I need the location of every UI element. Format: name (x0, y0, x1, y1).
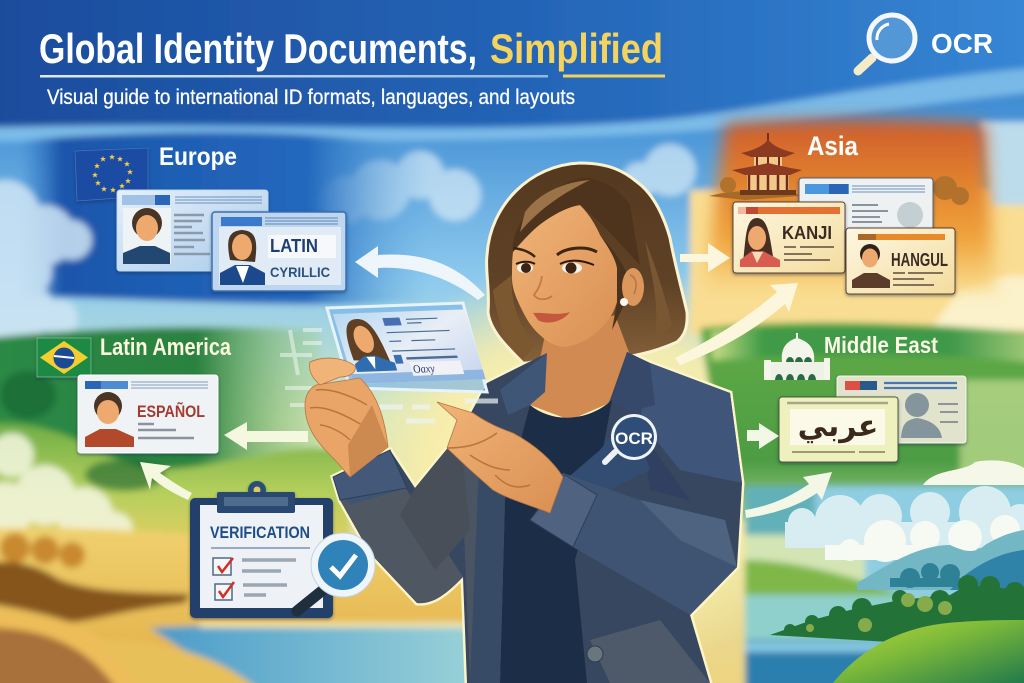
icon: EU flag (75, 148, 148, 201)
icon: magnifier with check (297, 533, 375, 611)
Asia heading: Asia (807, 131, 859, 161)
shirt (500, 400, 612, 683)
clipboard heading: VERIFICATION (210, 524, 310, 542)
arrow: to Asia (680, 243, 730, 272)
OCR logo (858, 15, 993, 71)
icon: pagoda (709, 133, 969, 205)
arrows (140, 243, 832, 518)
finger details (447, 433, 530, 487)
ID card: back (799, 178, 933, 232)
bottom right scenery (770, 460, 1024, 683)
ear and earring (620, 268, 644, 306)
ID card held: Oaxy (411, 363, 437, 376)
facial features (513, 248, 597, 323)
icon: Brazil flag (37, 338, 91, 377)
ID card: Espanol: ESPAÑOL (137, 401, 205, 421)
OCR badge (605, 414, 657, 462)
subtitle: Visual guide to international ID formats, languages, and layouts (47, 86, 575, 109)
fist with thumb (305, 358, 388, 477)
ID card: back man (117, 190, 268, 271)
ID card: Latin Cyrillic: LATIN (270, 235, 318, 256)
cuff left arm (333, 450, 407, 500)
Europe heading: Europe (159, 143, 237, 171)
jacket (333, 352, 742, 683)
clipboard board (190, 481, 333, 618)
title: Simplified (490, 25, 663, 72)
hair front (493, 178, 672, 360)
OCR logo: OCR (931, 28, 993, 59)
presenter (305, 163, 742, 683)
ID card: Latin Cyrillic: CYRILLIC (270, 264, 330, 280)
OCR badge: OCR (615, 429, 653, 448)
arrow: to Middle East (747, 423, 779, 449)
ID card: Hangul: HANGUL (891, 250, 948, 270)
button (587, 646, 603, 662)
icon: mosque (764, 333, 830, 380)
ID card: Arabic: عربي (798, 409, 878, 444)
panel: Middle East (764, 332, 966, 462)
panel: Asia (709, 131, 969, 294)
Middle East heading: Middle East (824, 332, 938, 358)
ID card: Hangul (846, 228, 955, 294)
Latin America heading: Latin America (100, 334, 232, 361)
arrow: Asia lower (675, 283, 798, 365)
presenter outline glow (333, 352, 742, 683)
arrow: from verification (140, 462, 192, 500)
checklist (213, 558, 296, 600)
Asia band glow (705, 120, 995, 290)
neck (530, 315, 630, 420)
ID card: Arabic (779, 397, 898, 462)
sleeve right arm (530, 473, 737, 615)
lapels (470, 352, 655, 683)
title: Global Identity Documents, (39, 25, 477, 72)
arrow: to Europe (355, 246, 485, 300)
ID card: Latin Cyrillic (212, 212, 346, 291)
hair shadow behind ear (600, 235, 626, 330)
face (512, 205, 617, 347)
ID card: Kanji (733, 202, 845, 273)
HUD scan dashes (280, 330, 322, 405)
panel: Europe (75, 143, 346, 291)
hand pointing (437, 402, 563, 513)
verification clipboard (190, 481, 375, 618)
arrow: Middle East lower (745, 472, 832, 518)
panel: Latin America (37, 334, 232, 453)
ID card: Espanol (78, 375, 218, 453)
ID card: back silhouette (837, 376, 966, 443)
back hair (487, 163, 687, 363)
arrow: to Latin America card (224, 422, 308, 450)
ID card: Kanji: KANJI (782, 223, 832, 243)
ID card held (327, 303, 498, 421)
